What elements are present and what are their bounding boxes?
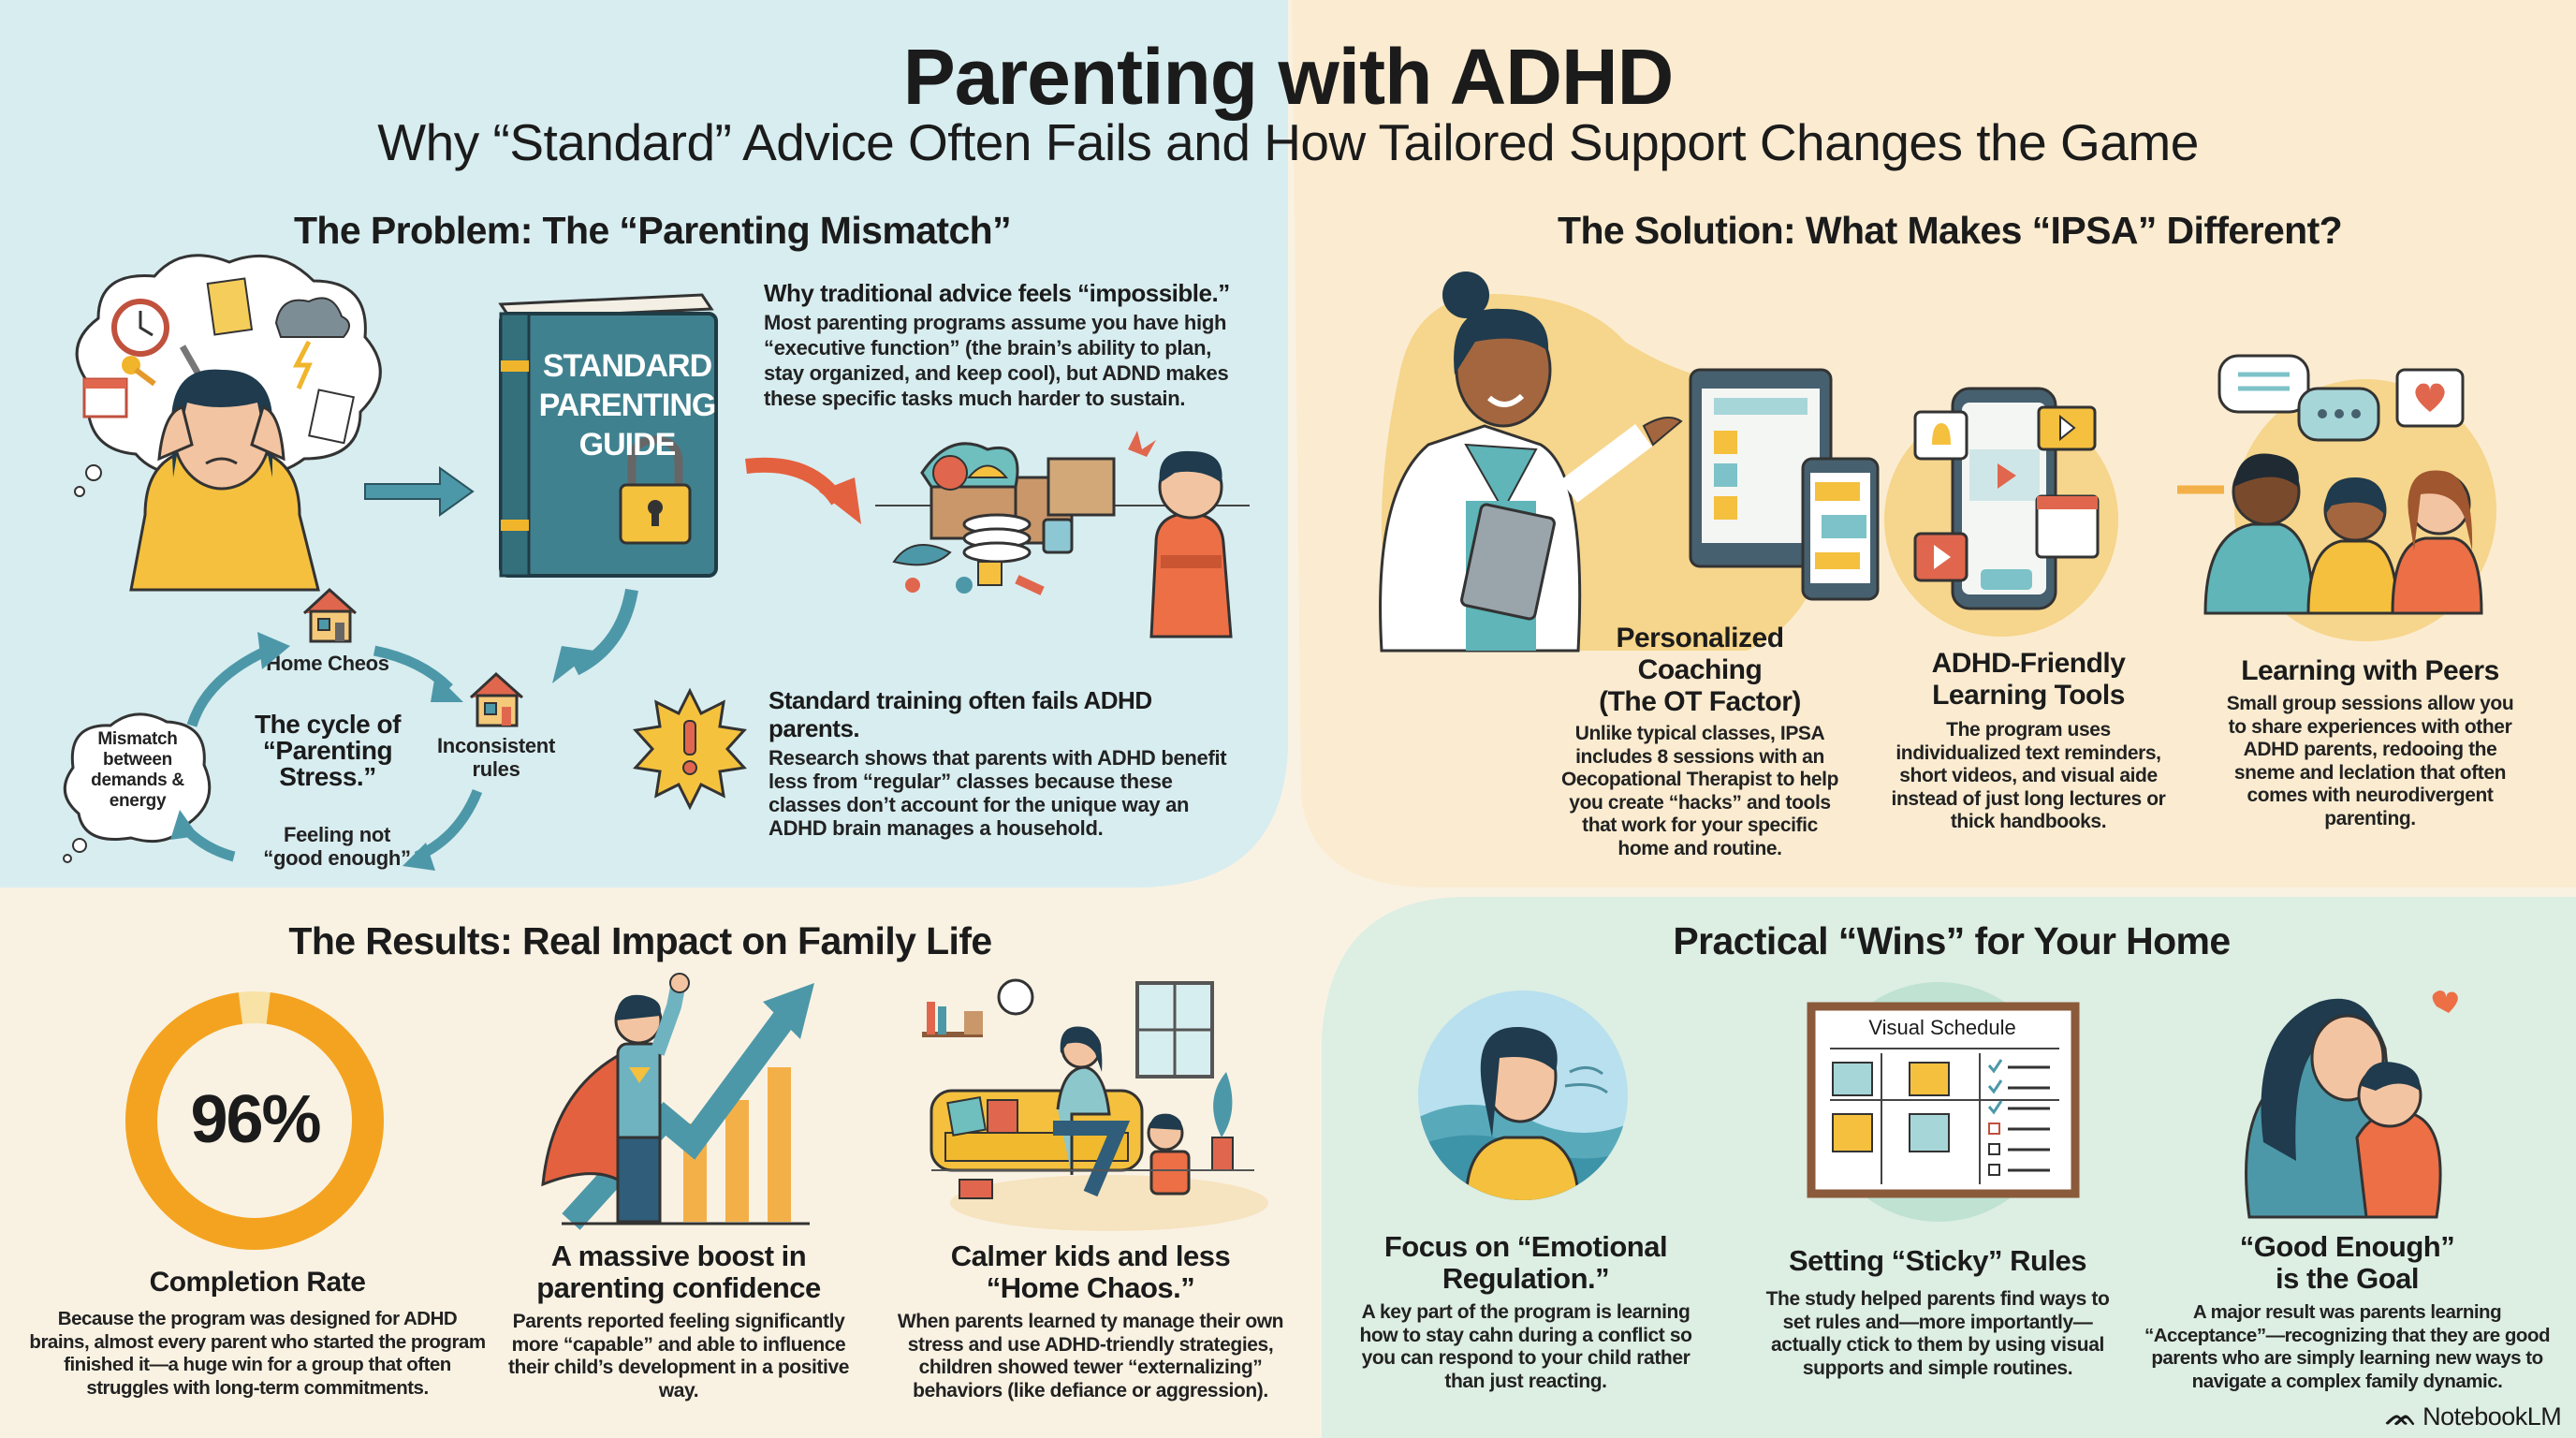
arrow: book down to cycle [552, 588, 638, 683]
icon: standard parenting guide book: GUIDE [579, 427, 675, 462]
icon: visual schedule board [1807, 982, 2080, 1222]
item: confidence boost [508, 1240, 849, 1401]
text: standard training often fails: Standard training often fails ADHD parents. [768, 686, 1152, 742]
text: cycle of parenting stress [255, 710, 401, 791]
item: confidence boost: Parents reported feeling significantly more “capable” and able to influence their child’s development in a positive way. [508, 1311, 849, 1401]
label: inconsistent rules: rules [472, 756, 520, 781]
item: completion rate: Completion Rate [150, 1267, 365, 1298]
heading: solution: The Solution: What Makes “IPSA” Different? [1558, 209, 2342, 252]
item: calmer kids: Calmer kids and less [951, 1240, 1230, 1272]
item: ADHD-friendly learning tools: ADHD-Friendly [1932, 648, 2125, 679]
icon: messy home and upset child [875, 431, 1250, 638]
icon: home chaos house [303, 588, 357, 642]
item: calmer kids: When parents learned ty manage their own stress and use ADHD-triendly strategies, children showed tewer “externalizing” behaviors (like defiance or aggression). [898, 1311, 1283, 1401]
icon: peer group [2203, 354, 2496, 641]
arrow: parent to book [364, 466, 475, 517]
item: good enough [2144, 1230, 2550, 1391]
connectors [2177, 485, 2224, 494]
chart: 96% completion donut: 96% [190, 1082, 320, 1157]
panel: solution [1379, 209, 2513, 859]
cloud: mismatch [63, 712, 212, 863]
icon: warning starburst [633, 687, 747, 811]
icon: calm living room [922, 979, 1268, 1231]
label: home cheos: Home Cheos [266, 652, 389, 675]
item: confidence boost: A massive boost in [551, 1240, 806, 1272]
cloud: mismatch: Mismatch [97, 729, 178, 749]
icon: stressed parent with thought cloud [74, 254, 382, 592]
cloud: mismatch: energy [110, 791, 166, 811]
heading: problem: The Problem: The “Parenting Mismatch” [294, 209, 1011, 252]
item: emotional regulation: Regulation.” [1442, 1262, 1609, 1295]
icon: phone with learning tools [1884, 388, 2118, 637]
icon: standard parenting guide book: PARENTING [539, 388, 715, 423]
icon: visual schedule board: Visual Schedule [1868, 1016, 2016, 1039]
text: standard training often fails [768, 686, 1226, 840]
item: good enough: A major result was parents learning “Acceptance”—recognizing that they are good parents who are simply learning new ways to navigate a complex family dynamic. [2144, 1301, 2550, 1391]
icon: parent hugging child [2245, 990, 2458, 1219]
item: good enough: is the Goal [2276, 1262, 2419, 1295]
item: calmer kids: “Home Chaos.” [987, 1271, 1194, 1304]
heading: results: The Results: Real Impact on Family Life [288, 919, 992, 962]
heading: wins: Practical “Wins” for Your Home [1673, 919, 2231, 962]
title: Parenting with ADHD [903, 33, 1673, 121]
item: emotional regulation [1359, 1230, 1692, 1391]
item: sticky rules [1765, 1244, 2109, 1378]
cloud: mismatch: between [103, 750, 172, 770]
item: personalized coaching: Unlike typical classes, IPSA includes 8 sessions with an Oecopational Therapist to help you create “hacks” and tools that work for your specific home and routine. [1561, 723, 1838, 859]
icon: standard parenting guide book: STANDARD [543, 348, 711, 384]
text: why traditional advice feels impossible: Why traditional advice feels “impossible.” [764, 279, 1230, 307]
label: inconsistent rules [437, 734, 556, 781]
label: feeling not good enough: “good enough” [263, 846, 411, 869]
item: personalized coaching: Personalized [1616, 623, 1784, 653]
icon: occupational therapist with devices [1379, 271, 1880, 652]
subtitle: Why “Standard” Advice Often Fails and How Tailored Support Changes the Game [377, 113, 2199, 171]
icon: inconsistent rules house [470, 672, 523, 726]
arrow: book to chaos [745, 457, 861, 524]
label: feeling not good enough [263, 823, 411, 869]
item: ADHD-friendly learning tools: The program uses individualized text reminders, short videos, and visual aide instead of just long lectures or thick handbooks. [1892, 719, 2165, 832]
item: personalized coaching [1561, 623, 1838, 859]
text: cycle of parenting stress: “Parenting [263, 736, 392, 765]
item: personalized coaching: Coaching [1638, 654, 1762, 685]
item: learning with peers: Learning with Peers [2241, 655, 2499, 686]
label: inconsistent rules: Inconsistent [437, 734, 555, 757]
chart: 96% completion donut [125, 991, 384, 1250]
item: ADHD-friendly learning tools: Learning Tools [1932, 680, 2125, 711]
icon: standard parenting guide book [498, 294, 718, 578]
cloud: mismatch: demands & [91, 770, 184, 790]
icon: calm breathing parent [1418, 990, 1628, 1200]
panel: results [29, 919, 1283, 1401]
panel: problem [63, 209, 1250, 871]
panel: practical wins [1359, 919, 2561, 1431]
item: emotional regulation: A key part of the program is learning how to stay cahn during a conflict so you can respond to your child rather than just reacting. [1359, 1301, 1692, 1391]
arrows: cycle [170, 632, 482, 871]
text: why traditional advice feels impossible: Most parenting programs assume you have high “executive function” (the brain’s ability to plan, stay organized, and keep cool), but ADND makes these specific tasks much harder to sustain. [764, 311, 1228, 410]
item: learning with peers: Small group sessions allow you to share experiences with other ADHD parents, redooing the sneme and leclation that often comes with neurodivergent parenting. [2227, 693, 2513, 829]
diagram: cycle of parenting stress [63, 588, 556, 871]
item: completion rate [29, 1267, 486, 1399]
item: confidence boost: parenting confidence [536, 1271, 821, 1304]
text: cycle of parenting stress: The cycle of [255, 710, 401, 739]
item: completion rate: Because the program was designed for ADHD brains, almost every parent who started the program finished it—a huge win for a group that often struggles with long-term commitments. [29, 1308, 486, 1399]
item: ADHD-friendly learning tools [1892, 648, 2166, 832]
text: cycle of parenting stress: Stress.” [279, 762, 376, 791]
item: emotional regulation: Focus on “Emotional [1384, 1230, 1667, 1263]
item: calmer kids [897, 1240, 1283, 1401]
label: feeling not good enough: Feeling not [284, 823, 390, 846]
text: standard training often fails: Research shows that parents with ADHD benefit less from “regular” classes because these classes don’t account for the unique way an ADHD brain manages a household. [768, 746, 1226, 840]
item: sticky rules: The study helped parents find ways to set rules and—more importantly—actually ctick to them by using visual supports and simple routines. [1766, 1288, 2109, 1378]
item: good enough: “Good Enough” [2240, 1230, 2454, 1263]
item: personalized coaching: (The OT Factor) [1599, 686, 1801, 717]
icon: superhero parent with growth arrow [541, 973, 814, 1230]
logo: NotebookLM: ᨏ NotebookLM [2385, 1402, 2561, 1431]
item: sticky rules: Setting “Sticky” Rules [1789, 1244, 2086, 1277]
